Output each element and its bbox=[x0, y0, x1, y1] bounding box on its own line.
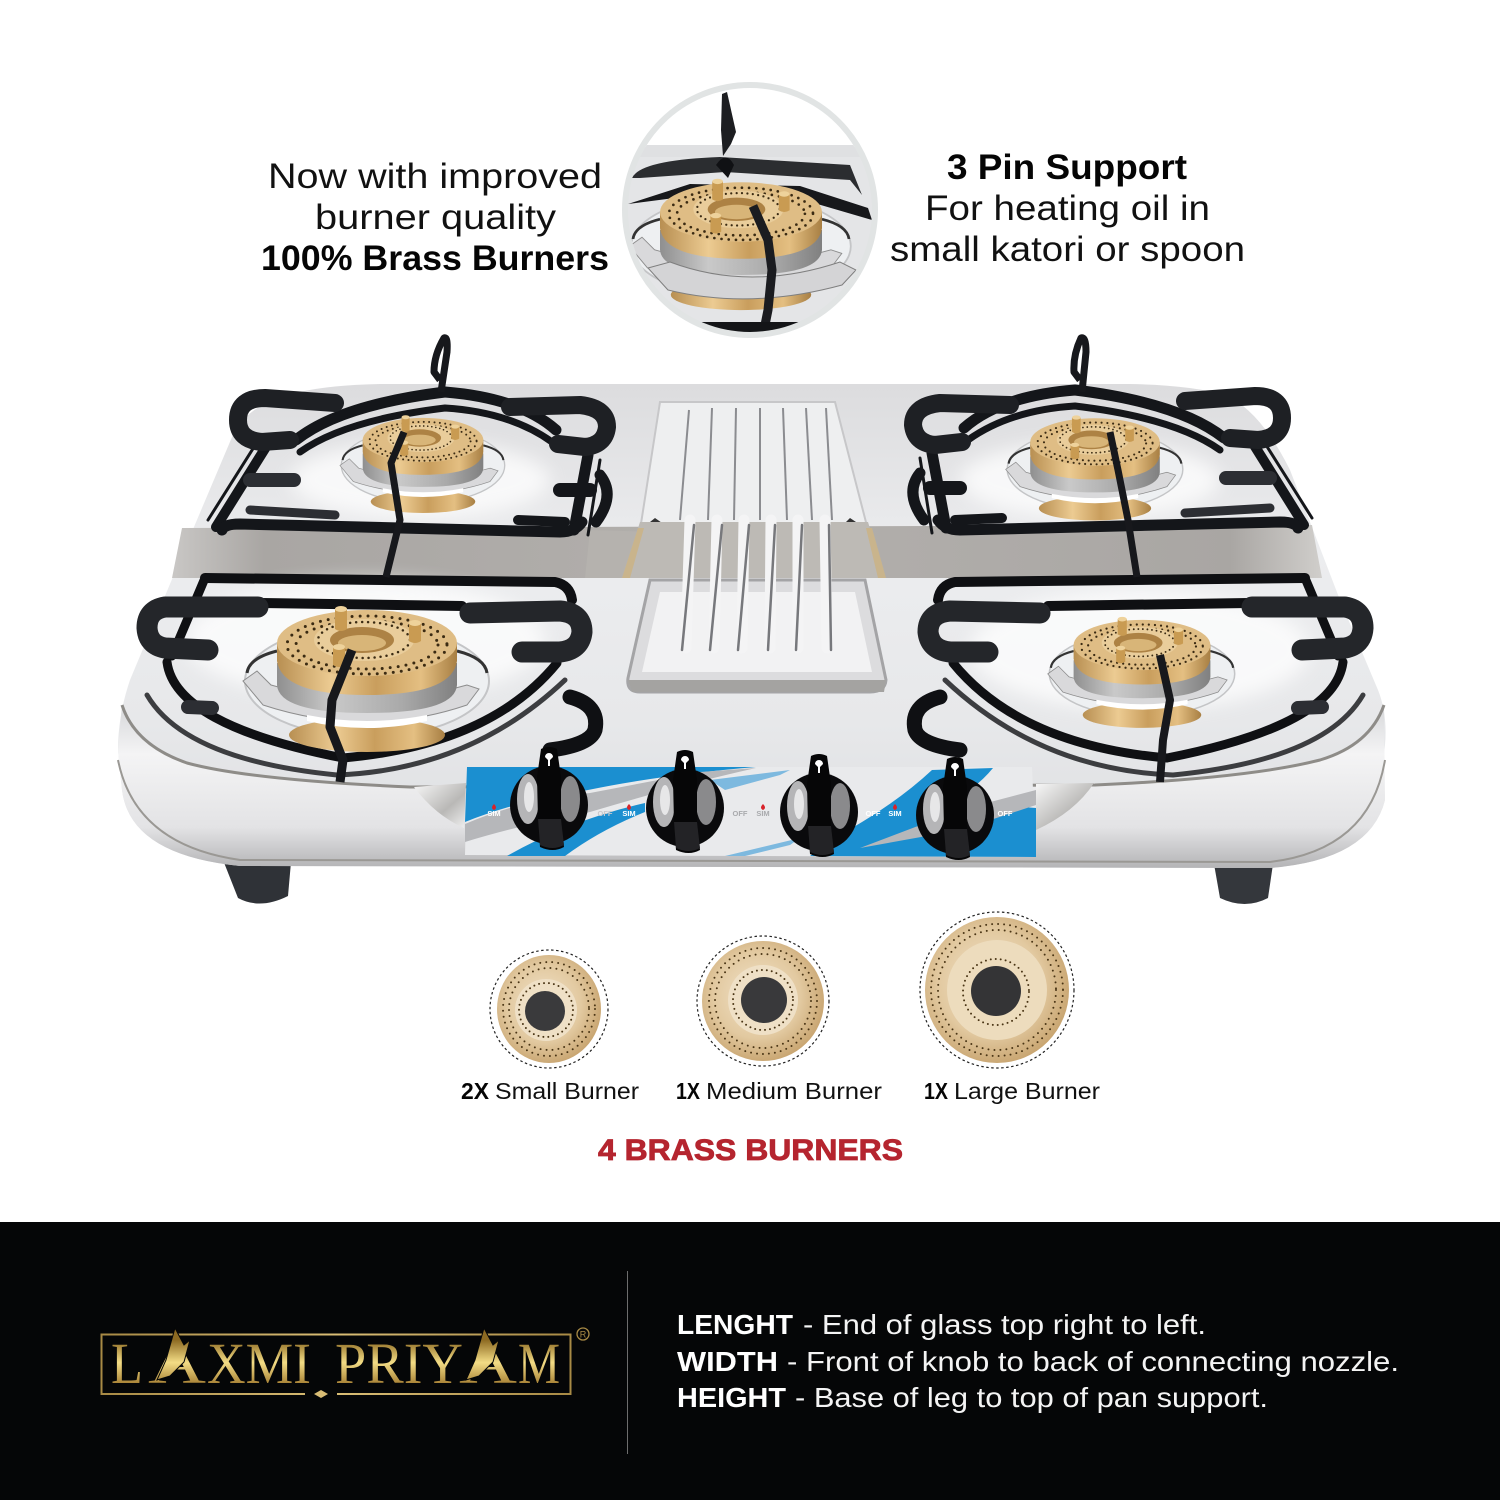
burner labels: 1X bbox=[924, 1078, 949, 1104]
top right burner bbox=[1006, 415, 1183, 520]
logo: R bbox=[580, 1330, 587, 1340]
stainless steel body bbox=[118, 384, 1386, 868]
dimension notes bbox=[677, 1309, 1399, 1413]
dimension notes: LENGHT bbox=[677, 1309, 793, 1340]
dimension notes: - Base of leg to top of pan support. bbox=[795, 1382, 1268, 1413]
panel labels: SIM bbox=[888, 809, 902, 818]
front band bbox=[118, 705, 1385, 868]
top right prong bbox=[1074, 338, 1137, 577]
logo: A bbox=[148, 1331, 206, 1396]
panel labels: SIM bbox=[622, 809, 636, 818]
deck reflections bbox=[185, 442, 1310, 710]
small burner bbox=[490, 950, 608, 1068]
text block: 3 pin support bbox=[890, 148, 1245, 269]
dimension notes: - End of glass top right to left. bbox=[803, 1309, 1206, 1340]
right foot bbox=[1214, 864, 1273, 904]
dimension notes: HEIGHT bbox=[677, 1382, 786, 1413]
logo: XMI bbox=[207, 1331, 311, 1396]
logo: L bbox=[111, 1331, 143, 1396]
black footer band bbox=[0, 1222, 1500, 1500]
burner labels bbox=[461, 1078, 1100, 1104]
text block: 3 pin support: small katori or spoon bbox=[890, 230, 1245, 269]
control panel bbox=[465, 767, 1036, 857]
panel labels: SIM bbox=[487, 809, 501, 818]
burner labels: 2X bbox=[461, 1078, 490, 1104]
panel labels bbox=[487, 804, 1013, 818]
text block: improved burner quality: Now with improved bbox=[268, 157, 602, 196]
burner labels: 1X bbox=[676, 1078, 701, 1104]
left foot bbox=[223, 860, 291, 904]
dimension notes: WIDTH bbox=[677, 1346, 778, 1377]
text block: improved burner quality: 100% Brass Burners bbox=[261, 239, 609, 278]
top left burner bbox=[340, 415, 505, 513]
knob 4 bbox=[916, 757, 994, 860]
text block: 3 pin support: For heating oil in bbox=[925, 189, 1210, 228]
bottom right prong bbox=[1160, 655, 1170, 782]
panel labels: OFF bbox=[598, 809, 613, 818]
logo: A bbox=[459, 1331, 517, 1396]
bottom right pan support bbox=[914, 578, 1363, 775]
panel labels: OFF bbox=[998, 809, 1013, 818]
top left prong bbox=[386, 338, 447, 577]
panel labels: OFF bbox=[866, 809, 881, 818]
top left pan support bbox=[208, 392, 607, 535]
band shadow left bbox=[414, 783, 466, 828]
text block: 3 pin support: 3 Pin Support bbox=[947, 148, 1187, 187]
logo: PRIY bbox=[335, 1331, 463, 1396]
knob 2 bbox=[646, 750, 724, 853]
knob 1 bbox=[510, 747, 588, 850]
text block: improved burner quality: burner quality bbox=[315, 198, 557, 237]
bottom right burner bbox=[1048, 617, 1235, 728]
recessed strip bbox=[172, 525, 1322, 578]
burner labels: Large Burner bbox=[954, 1078, 1100, 1104]
bottom left pan support bbox=[147, 578, 596, 775]
large burner bbox=[920, 912, 1074, 1068]
burner labels: Small Burner bbox=[495, 1078, 639, 1104]
logo bbox=[102, 1328, 589, 1398]
medium burner bbox=[697, 936, 829, 1066]
band shadow right bbox=[1036, 783, 1094, 830]
centre drip tray bbox=[585, 402, 886, 692]
panel labels: SIM bbox=[756, 809, 770, 818]
burner labels: Medium Burner bbox=[706, 1078, 882, 1104]
top right pan support bbox=[913, 390, 1312, 533]
heading: 4 brass burners: 4 BRASS BURNERS bbox=[598, 1134, 903, 1167]
logo: M bbox=[518, 1331, 560, 1396]
bottom left burner bbox=[243, 606, 489, 752]
dimension notes: - Front of knob to back of connecting nozzle. bbox=[787, 1346, 1399, 1377]
stove illustration bbox=[118, 338, 1386, 904]
knob 3 bbox=[780, 754, 858, 857]
panel labels: OFF bbox=[732, 809, 748, 818]
bottom left prong bbox=[330, 650, 352, 782]
text block: improved burner quality bbox=[261, 157, 609, 278]
circular inset: burner close-up bbox=[620, 85, 880, 340]
